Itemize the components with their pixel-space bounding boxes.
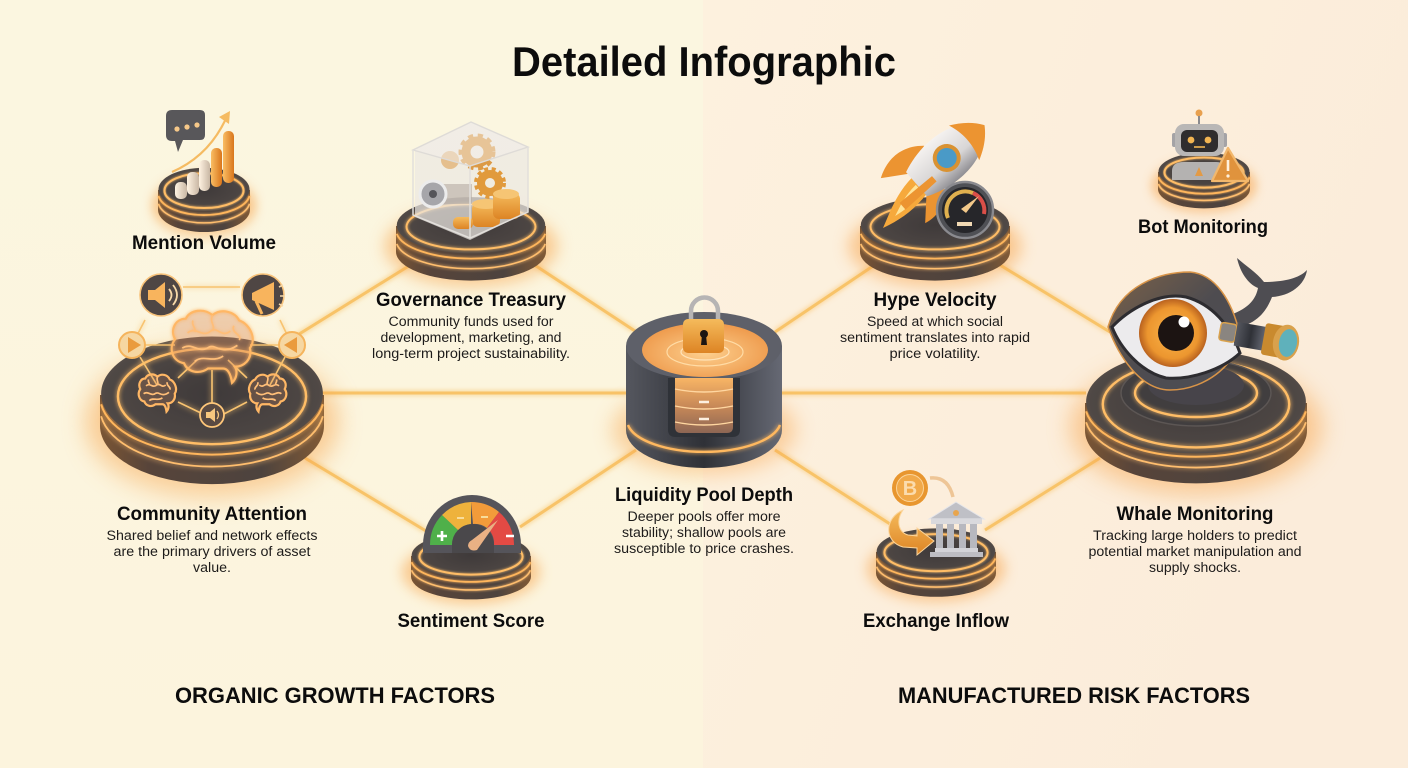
icon: right node <box>279 332 305 358</box>
label: Mention Volume <box>132 233 276 254</box>
icon: bank <box>929 502 984 557</box>
panel: mention volume <box>132 110 276 254</box>
label: Sentiment Score <box>398 611 544 632</box>
platform <box>384 197 558 287</box>
icon: left node <box>119 332 145 358</box>
icon: big brain <box>172 311 253 383</box>
network links <box>132 287 292 415</box>
panel: bot monitoring <box>1138 110 1268 238</box>
icon: warning triangle <box>1212 148 1248 181</box>
panel: exchange inflow <box>863 470 1009 632</box>
icon: transparent safe <box>413 122 528 240</box>
platform <box>866 528 1006 602</box>
inner rings <box>1121 360 1271 426</box>
icon: pool cylinder <box>612 312 796 474</box>
icon: bitcoin coin: B <box>903 478 917 500</box>
icon: eye <box>1108 272 1240 390</box>
icon: speaker bubble <box>140 274 182 316</box>
icon: whale tail <box>1230 258 1307 328</box>
label and description <box>106 504 318 575</box>
platform <box>1151 153 1257 213</box>
label: Bot Monitoring <box>1138 217 1268 238</box>
icon: robot <box>1172 110 1227 180</box>
label and description: Hype Velocity <box>874 290 997 311</box>
label and description: Shared belief and network effects <box>106 528 318 543</box>
label and description: stability; shallow pools are <box>622 525 786 540</box>
icon: spyglass <box>1217 313 1302 363</box>
icon: rising bars <box>172 111 234 199</box>
label and description: potential market manipulation and <box>1088 544 1302 559</box>
label and description <box>840 290 1030 361</box>
icon: speedometer <box>937 182 993 238</box>
icon: megaphone bubble <box>242 274 285 316</box>
icon: right brain <box>249 374 286 412</box>
label: Exchange Inflow <box>863 611 1009 632</box>
platform <box>401 533 541 604</box>
label and description: Governance Treasury <box>376 290 566 311</box>
label and description: Community Attention <box>117 504 307 525</box>
icon: padlock <box>683 298 724 353</box>
label and description: Deeper pools offer more <box>628 509 780 524</box>
platform <box>84 336 340 496</box>
icon: left brain <box>139 374 176 412</box>
label and description: Tracking large holders to predict <box>1093 528 1297 543</box>
icon: inflow arrow <box>889 510 934 555</box>
panel: governance treasury <box>372 122 570 361</box>
icon: chat bubble <box>166 110 205 152</box>
label and description: Speed at which social <box>867 314 1003 329</box>
panel: hype velocity <box>840 98 1030 361</box>
panel: whale monitoring <box>1069 258 1323 575</box>
icon: thin curved arrow <box>930 478 953 497</box>
label and description: Liquidity Pool Depth <box>615 485 793 506</box>
label and description: long-term project sustainability. <box>372 346 570 361</box>
label and description: susceptible to price crashes. <box>614 541 794 556</box>
title: Detailed Infographic <box>512 38 896 85</box>
label and description: Community funds used for <box>388 314 554 329</box>
panel: liquidity pool depth <box>612 298 796 556</box>
heading: organic growth factors: ORGANIC GROWTH FACTORS <box>175 683 495 708</box>
panel: community attention <box>84 274 340 575</box>
label and description: Whale Monitoring <box>1116 504 1274 525</box>
label and description: price volatility. <box>890 346 980 361</box>
icon: small speaker node <box>200 403 224 427</box>
icon: rocket <box>852 98 1008 247</box>
label and description: development, marketing, and <box>380 330 562 345</box>
platform <box>848 197 1022 287</box>
label and description <box>1088 504 1302 575</box>
heading: manufactured risk factors: MANUFACTURED RISK FACTORS <box>898 683 1250 708</box>
platform <box>151 168 257 237</box>
icon: gauge <box>423 495 521 553</box>
panel: sentiment score <box>398 495 544 632</box>
label and description: value. <box>193 560 231 575</box>
platform <box>1069 350 1323 494</box>
label and description <box>614 485 794 556</box>
label and description <box>372 290 570 361</box>
label and description: supply shocks. <box>1149 560 1241 575</box>
label and description: sentiment translates into rapid <box>840 330 1030 345</box>
icon: bitcoin coin <box>892 470 928 506</box>
label and description: are the primary drivers of asset <box>114 544 311 559</box>
connector network <box>296 262 1110 531</box>
